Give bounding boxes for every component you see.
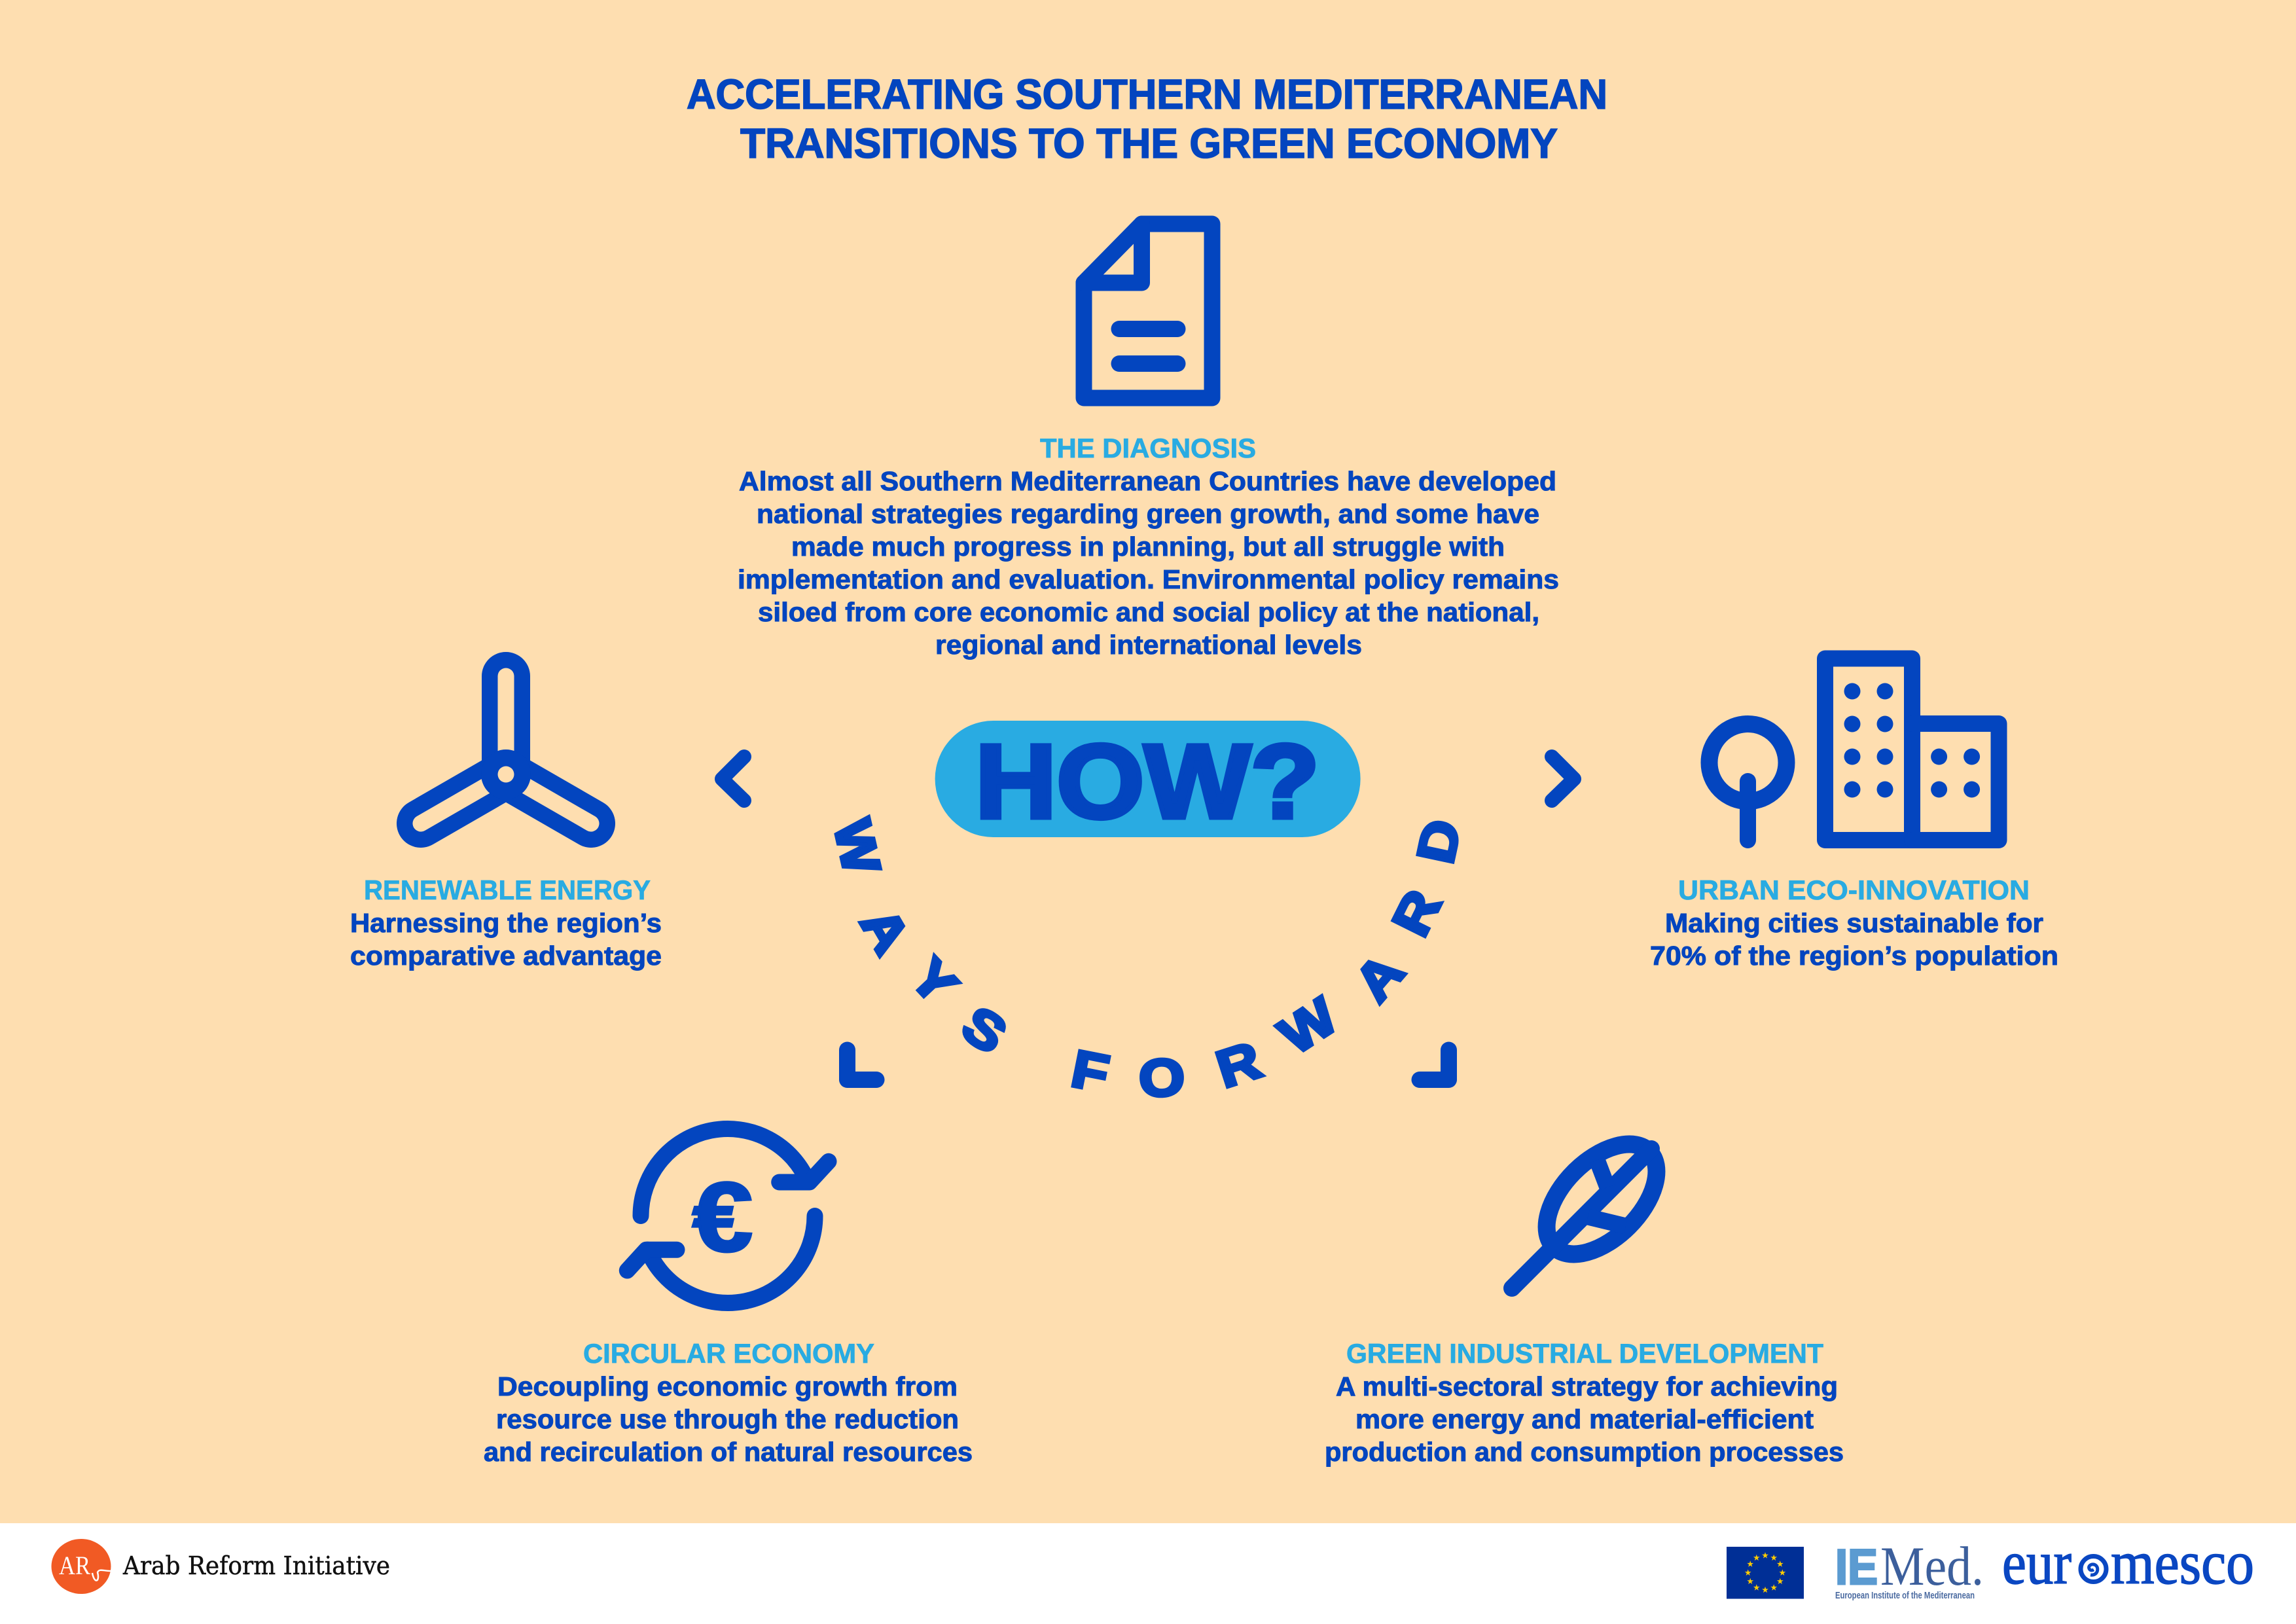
curved text: ways forward: A <box>1343 942 1415 1012</box>
logo: iemed: IE <box>1835 1540 1878 1595</box>
text block: green industrial development: more energy and material-efficient <box>1355 1404 1814 1434</box>
text block: circular economy: CIRCULAR ECONOMY <box>583 1338 874 1369</box>
text block: renewable energy: comparative advantage <box>350 941 662 971</box>
text block: renewable energy: Harnessing the region’s <box>350 908 662 938</box>
icon: circular euro arrows: € <box>692 1162 753 1272</box>
text block: green industrial development: A multi-sectoral strategy for achieving <box>1336 1371 1838 1401</box>
curved text: ways forward: S <box>952 994 1017 1065</box>
curved text: ways forward: R <box>1381 881 1452 945</box>
logo: iemed <box>1835 1536 1984 1601</box>
icon: document <box>1084 224 1212 398</box>
text block: circular economy: Decoupling economic growth from <box>497 1371 958 1401</box>
curved text: ways forward: W <box>823 814 891 879</box>
curved text: ways forward: Y <box>899 947 969 1015</box>
title <box>687 71 1607 167</box>
text block: green industrial development: production and consumption processes <box>1325 1437 1844 1467</box>
text block: the diagnosis: national strategies regarding green growth, and some have <box>757 499 1539 529</box>
text block: the diagnosis: Almost all Southern Mediterranean Countries have developed <box>739 466 1556 496</box>
text block: the diagnosis: regional and international levels <box>935 630 1362 660</box>
logo: euromesco: mesco <box>2111 1529 2254 1597</box>
arrow: bottom left corner <box>847 1050 876 1080</box>
logo: arab reform initiative: AR <box>59 1551 90 1580</box>
title: ACCELERATING SOUTHERN MEDITERRANEAN <box>687 71 1607 118</box>
text block: green industrial development: GREEN INDUSTRIAL DEVELOPMENT <box>1346 1338 1823 1369</box>
logo: arab reform initiative <box>51 1539 390 1594</box>
logo: euromesco <box>2002 1529 2254 1597</box>
logo: euromesco: eur <box>2002 1529 2072 1597</box>
logo: eu flag <box>1727 1547 1804 1598</box>
text block: circular economy: resource use through the reduction <box>496 1404 959 1434</box>
text block: urban eco-innovation: Making cities sustainable for <box>1665 908 2043 938</box>
text block: circular economy <box>484 1338 973 1467</box>
text block: urban eco-innovation <box>1650 875 2058 971</box>
text block: circular economy: and recirculation of natural resources <box>484 1437 973 1467</box>
how pill: HOW? <box>975 723 1319 840</box>
arrow: right chevron <box>1552 757 1574 801</box>
text block: green industrial development <box>1325 1338 1844 1467</box>
text block: the diagnosis: made much progress in planning, but all struggle with <box>791 532 1505 562</box>
icon: tree and buildings <box>1710 659 1999 840</box>
title: TRANSITIONS TO THE GREEN ECONOMY <box>740 120 1558 167</box>
curved text: ways forward: W <box>1269 986 1348 1066</box>
arrow: left chevron <box>722 757 744 801</box>
curved text: ways forward: D <box>1406 814 1472 868</box>
curved text: ways forward: F <box>1067 1039 1113 1103</box>
text block: renewable energy <box>350 875 662 971</box>
text block: the diagnosis <box>738 433 1559 660</box>
logo: arab reform initiative: Arab Reform Initiative <box>122 1551 390 1580</box>
text block: the diagnosis: implementation and evaluation. Environmental policy remains <box>738 564 1559 594</box>
text block: the diagnosis: siloed from core economic and social policy at the national, <box>758 597 1539 627</box>
logo: iemed: European Institute of the Mediterranean <box>1835 1590 1975 1601</box>
curved text: ways forward: A <box>850 897 922 964</box>
text block: urban eco-innovation: 70% of the region’s population <box>1650 941 2058 971</box>
curved text: ways forward: R <box>1210 1030 1268 1099</box>
text block: renewable energy: RENEWABLE ENERGY <box>364 875 651 905</box>
text block: the diagnosis: THE DIAGNOSIS <box>1040 433 1256 463</box>
logo: iemed: Med. <box>1880 1536 1984 1597</box>
text block: urban eco-innovation: URBAN ECO-INNOVATION <box>1678 875 2030 905</box>
icon: leaf <box>1512 1124 1677 1288</box>
icon: wind turbine <box>421 676 591 823</box>
arrow: bottom right corner <box>1420 1050 1449 1080</box>
curved text: ways forward <box>823 814 1472 1108</box>
curved text: ways forward: O <box>1138 1047 1186 1108</box>
icon: circular euro arrows <box>627 1129 829 1303</box>
